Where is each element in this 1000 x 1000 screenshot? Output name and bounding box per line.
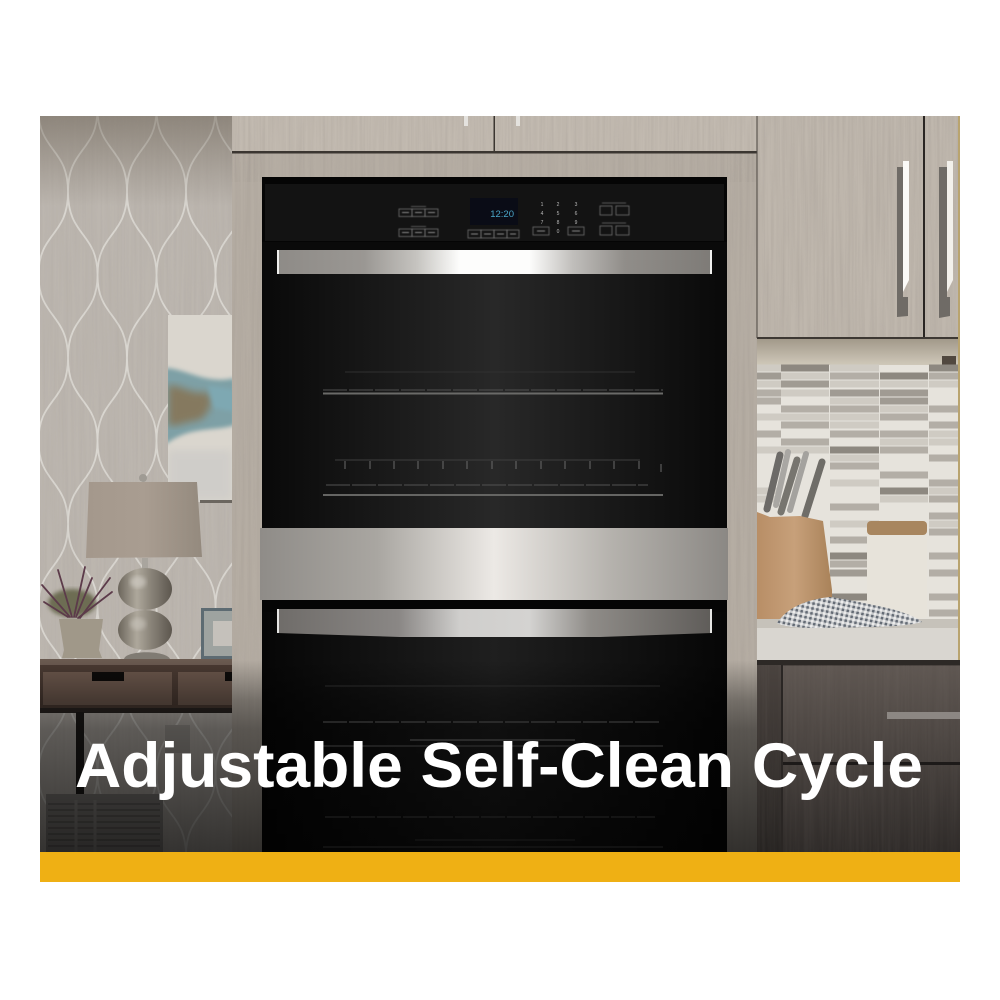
countertop: [757, 619, 960, 665]
gold edge: [958, 116, 960, 660]
knives: [767, 452, 822, 516]
side table: [40, 659, 232, 852]
number keypad: 5: [557, 211, 560, 217]
folded checked towel: [777, 597, 922, 628]
number keypad: 2: [557, 202, 560, 208]
number keypad: 7: [541, 220, 544, 226]
upper door handle: [277, 250, 712, 274]
wallpaper wall: [40, 116, 232, 852]
lower oven racks: [323, 686, 663, 847]
number keypad: 6: [575, 211, 578, 217]
cabinet handle left: [897, 161, 909, 317]
number keypad: 0: [557, 229, 560, 235]
picture frame: [201, 608, 233, 659]
wall art painting: [165, 315, 235, 503]
mode buttons: [399, 203, 629, 238]
lower cabinet drawers: [757, 665, 960, 852]
cabinet handle right: [939, 161, 953, 318]
lower door top shadow strip: [262, 600, 727, 612]
floor vent: [46, 794, 163, 852]
drawer handle: [887, 712, 960, 719]
ceramic canister: [867, 521, 927, 618]
number keypad: 3: [575, 202, 578, 208]
oven clock display: 12:20: [490, 209, 514, 220]
upper door frame strip: [262, 242, 727, 250]
lower door handle: [277, 609, 712, 637]
bottom dark gradient overlay: [40, 660, 757, 852]
double wall oven: [260, 177, 728, 852]
right wall cabinets: [756, 116, 960, 339]
photo: kitchen scene: [40, 116, 960, 852]
headline: Adjustable Self-Clean Cycle: [75, 731, 923, 801]
number keypad: 8: [557, 220, 560, 226]
wall outlet: [165, 725, 190, 753]
brushed steel centre band: [260, 528, 728, 600]
under-cabinet soffit: [757, 339, 960, 365]
table lamp: [86, 474, 202, 659]
upper door: [262, 242, 727, 528]
lower door: [262, 600, 727, 852]
yellow footer bar: [40, 852, 960, 882]
upper oven racks: [323, 372, 663, 495]
control panel: [265, 184, 724, 241]
knife block with knives: [757, 452, 832, 620]
tile backsplash: [757, 365, 960, 621]
oven body: [262, 177, 727, 852]
number keypad: 1: [541, 202, 544, 208]
number keypad: [541, 202, 578, 235]
upper centre cabinets: [232, 116, 757, 154]
number keypad: 9: [575, 220, 578, 226]
number keypad: 4: [541, 211, 544, 217]
potted plant: [42, 567, 112, 658]
oven clock display: [470, 198, 518, 225]
cabinet column trim: [232, 152, 757, 852]
